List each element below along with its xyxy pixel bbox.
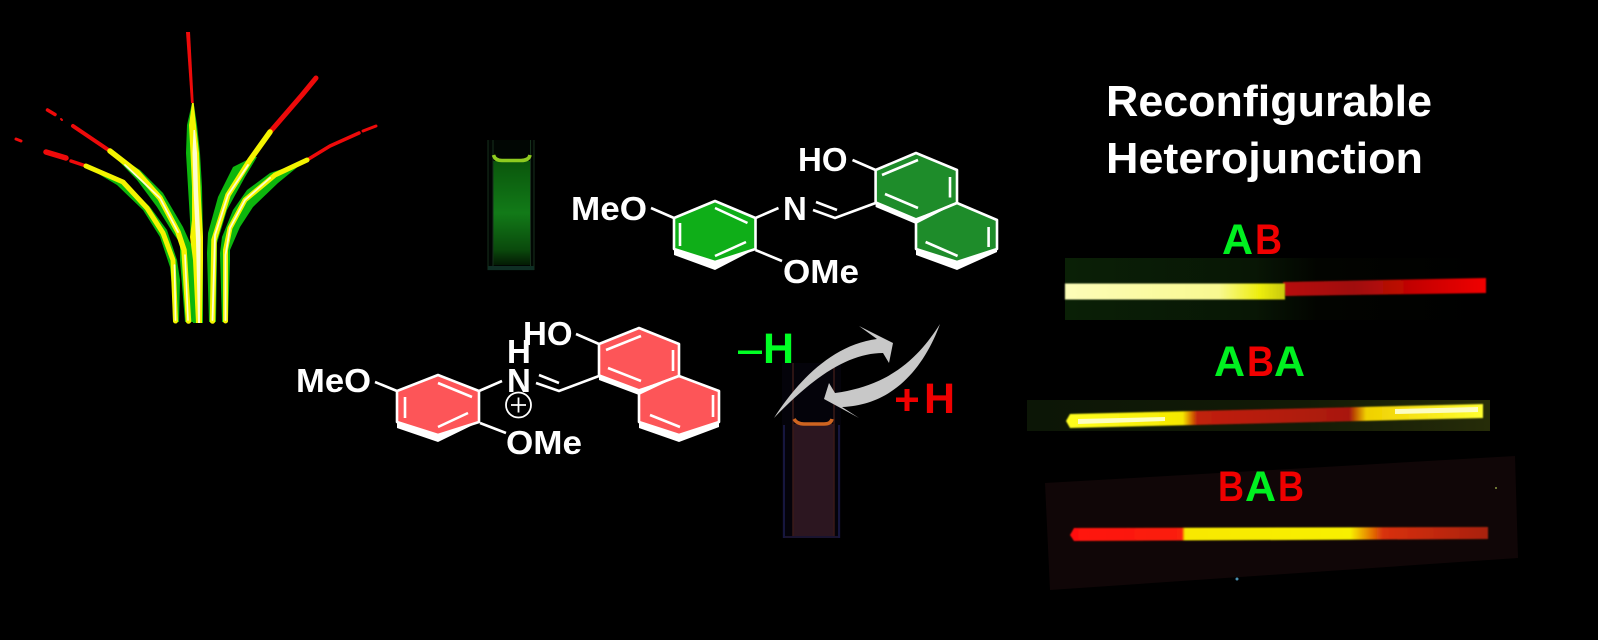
label: ABA bbox=[1214, 338, 1305, 386]
atom labels: N bbox=[783, 190, 807, 227]
label: ABA: B bbox=[1247, 338, 1274, 386]
atom labels: H bbox=[507, 333, 531, 370]
label: AB: A bbox=[1222, 216, 1253, 264]
naphthalene rings bbox=[876, 153, 997, 262]
bonds bbox=[651, 160, 989, 261]
label: ABA: A bbox=[1214, 338, 1245, 386]
atom labels: MeO bbox=[571, 190, 647, 227]
atom labels bbox=[571, 141, 859, 290]
naphthalene rings bbox=[599, 328, 719, 435]
atom labels: MeO bbox=[296, 362, 371, 399]
chemical structure: protonated red form bbox=[296, 315, 719, 461]
label: BAB bbox=[1218, 463, 1304, 511]
atom labels: OMe bbox=[506, 424, 582, 461]
bonds bbox=[375, 334, 713, 433]
fibre photo: BAB heterojunction bbox=[1045, 456, 1518, 590]
label: BAB: B bbox=[1218, 463, 1244, 511]
atom labels bbox=[296, 315, 582, 461]
dark red cuvette bbox=[782, 363, 841, 538]
green cuvette bbox=[488, 140, 534, 271]
atom labels: OMe bbox=[783, 253, 859, 290]
positive charge bbox=[506, 392, 531, 418]
phenyl ring bbox=[397, 375, 479, 435]
label: minus H: H bbox=[763, 325, 794, 373]
phenyl ring bbox=[674, 201, 756, 262]
red stem tips bbox=[16, 32, 376, 166]
label: plus H: H bbox=[924, 375, 955, 423]
label: BAB: B bbox=[1278, 463, 1304, 511]
label: plus H bbox=[896, 375, 955, 423]
atom labels: HO bbox=[523, 315, 572, 352]
label: BAB: A bbox=[1245, 463, 1276, 511]
arrow: protonation (curved, pointing left) bbox=[824, 324, 940, 418]
title: Heterojunction bbox=[1106, 134, 1423, 183]
title: Reconfigurable bbox=[1106, 77, 1432, 126]
fibre photo: ABA heterojunction bbox=[1027, 400, 1490, 431]
label: AB bbox=[1222, 216, 1282, 264]
arrow: deprotonation (curved, pointing right) bbox=[774, 326, 893, 418]
fibre photo: AB heterojunction bbox=[1065, 258, 1486, 320]
title bbox=[1106, 77, 1432, 183]
yellow body of stems bbox=[86, 103, 307, 323]
green halo of stems bbox=[87, 103, 300, 323]
atom labels: HO bbox=[798, 141, 848, 178]
label: minus H bbox=[738, 325, 794, 373]
label: ABA: A bbox=[1274, 338, 1305, 386]
plant-like branched fluorescent fibres bbox=[16, 32, 376, 323]
label: AB: B bbox=[1255, 216, 1282, 264]
chemical structure: neutral green form bbox=[571, 141, 997, 290]
atom labels: N bbox=[507, 362, 531, 399]
white core of stems bbox=[125, 130, 270, 323]
